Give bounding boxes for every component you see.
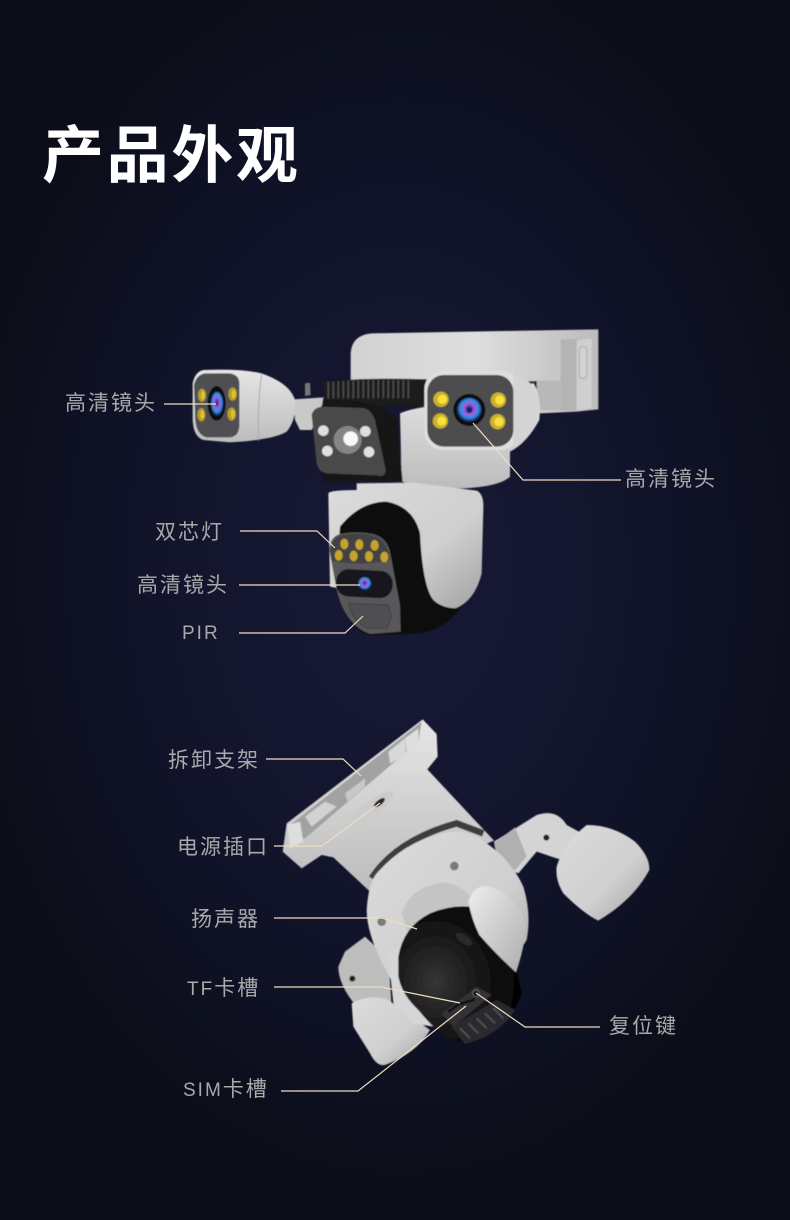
title: 产品外观 — [42, 105, 298, 195]
label: right HD lens — [473, 423, 717, 491]
label: power port — [177, 803, 380, 859]
label: reset button — [476, 993, 678, 1038]
label: dual-core light — [155, 521, 335, 548]
label: SIM card slot: SIM卡槽 — [183, 1078, 269, 1101]
lower side camera — [338, 937, 430, 1065]
left camera arm — [293, 383, 323, 430]
label: speaker — [191, 908, 417, 931]
right camera housing — [400, 383, 540, 488]
label: reset button: 复位键 — [609, 1015, 678, 1038]
label: PIR — [182, 616, 363, 644]
center spotlight module — [312, 400, 403, 482]
label: right HD lens: 高清镜头 — [625, 468, 717, 491]
camera rear view — [283, 719, 649, 1065]
label: power port: 电源插口 — [177, 836, 269, 859]
turret body — [367, 832, 529, 1000]
gear ring — [372, 823, 483, 878]
label: dual-core light: 双芯灯 — [155, 521, 224, 544]
screw holes — [377, 862, 474, 948]
left camera — [193, 370, 295, 442]
inner collar — [402, 883, 477, 950]
lower PTZ base — [328, 483, 483, 611]
label: detachable bracket: 拆卸支架 — [168, 749, 260, 772]
wall bracket — [351, 329, 598, 413]
lower PTZ face — [329, 532, 401, 634]
right camera — [424, 371, 539, 450]
lower collar — [388, 940, 433, 1027]
label: detachable bracket — [168, 749, 361, 776]
label: SIM card slot — [183, 1006, 466, 1101]
black dome — [398, 906, 522, 1044]
label: lower HD lens: 高清镜头 — [137, 574, 229, 597]
rotating black ring — [324, 379, 433, 407]
label: speaker: 扬声器 — [191, 908, 260, 931]
label: TF card slot — [187, 977, 460, 1003]
upper side camera — [494, 813, 649, 921]
label: left HD lens: 高清镜头 — [65, 392, 157, 415]
lower PTZ dome — [337, 502, 461, 635]
mounting bracket plate — [283, 719, 494, 892]
white dome cover — [468, 886, 525, 972]
label: PIR: PIR — [182, 623, 220, 644]
label: TF card slot: TF卡槽 — [187, 977, 260, 1000]
camera front view — [193, 329, 598, 635]
vent and card slots — [442, 987, 515, 1044]
